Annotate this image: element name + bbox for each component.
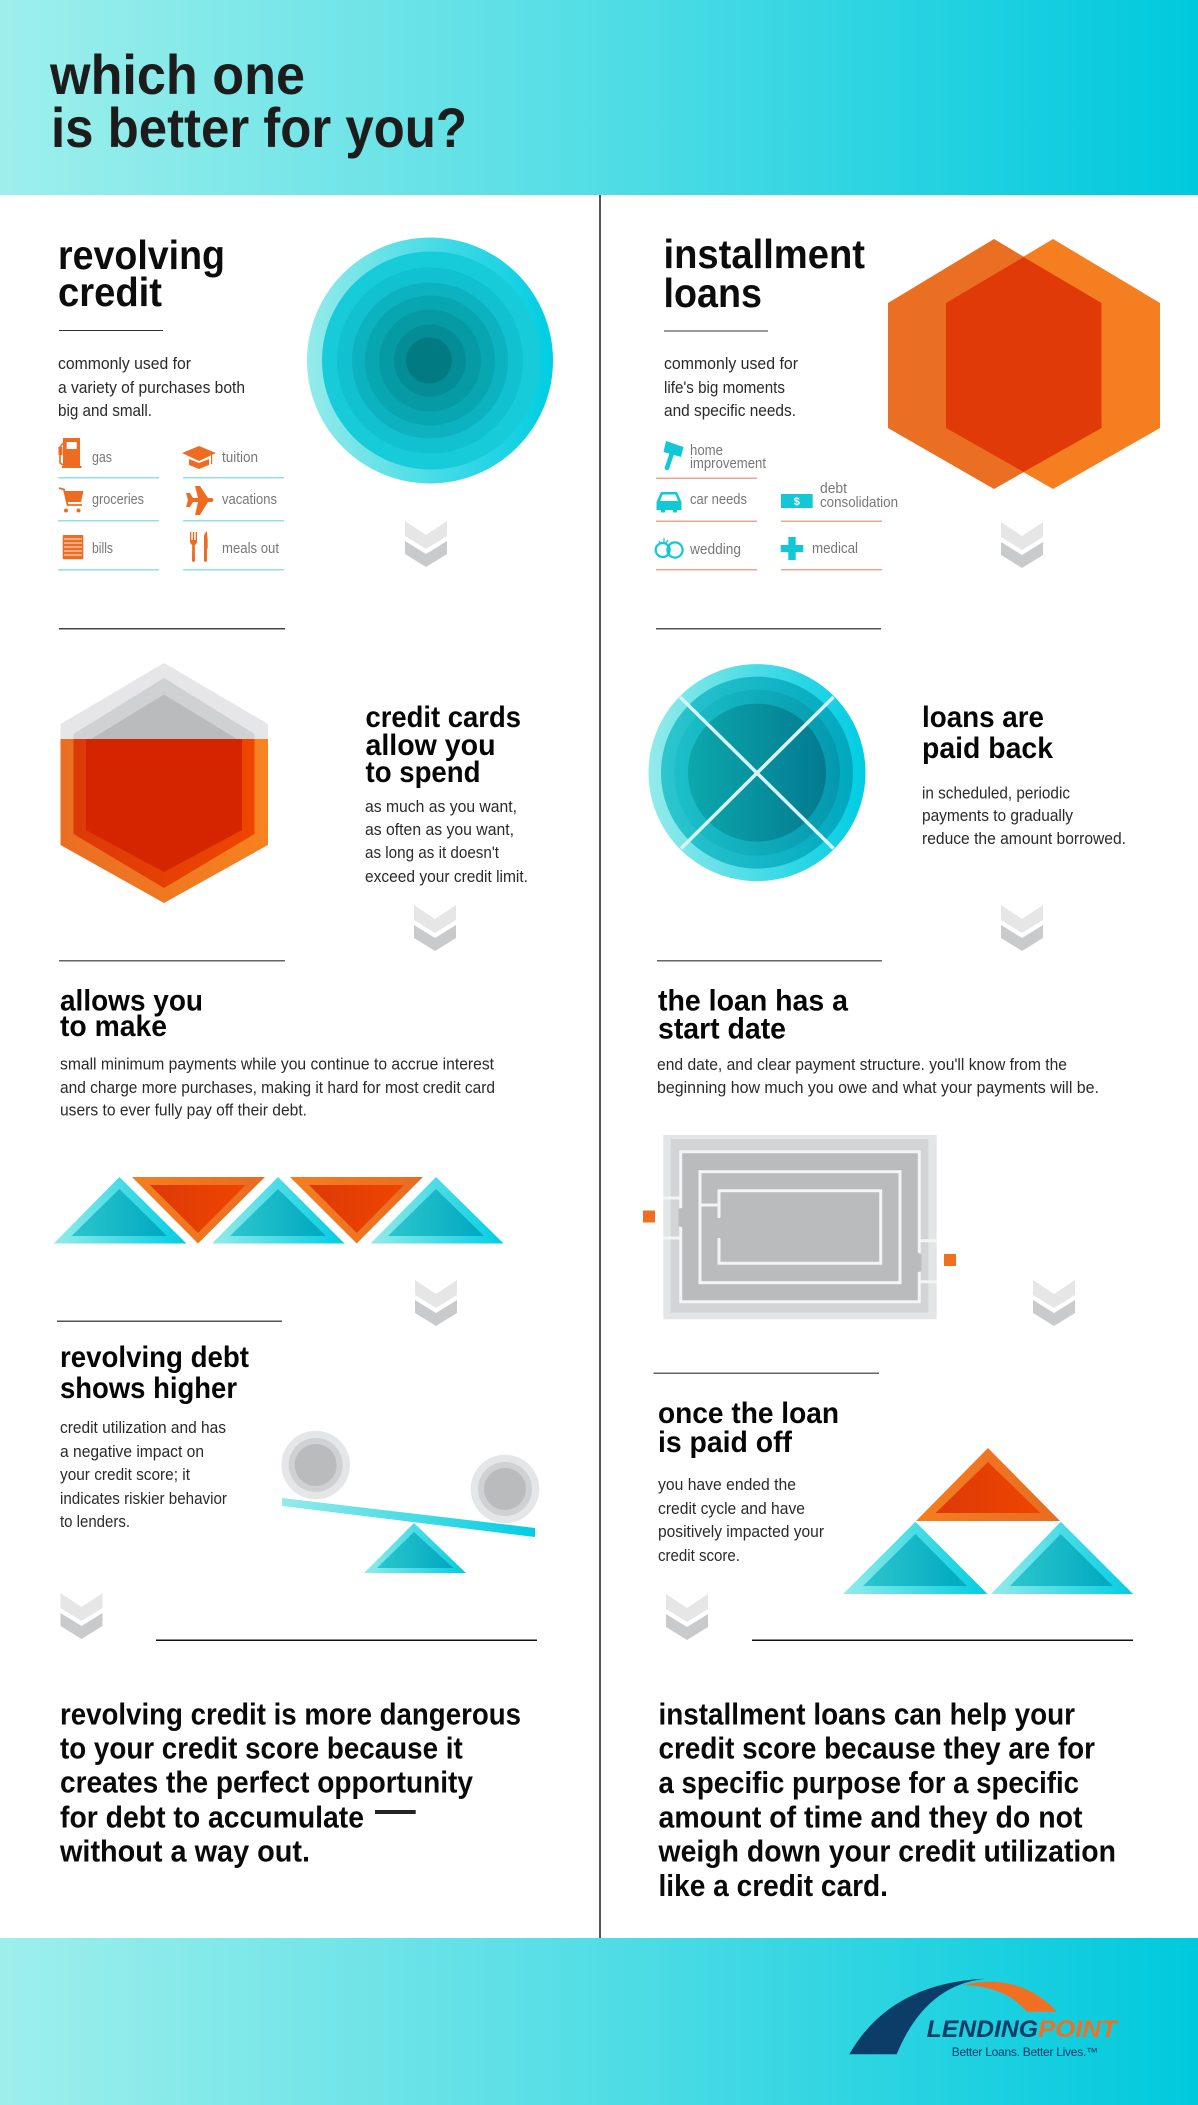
text: commonly used for [58,355,245,420]
text: once the loan is paid off: credit score. [658,1547,740,1565]
heading: revolving credit: credit [58,269,162,315]
text: credit cards allow you to spend: as long as it doesn't [365,844,499,862]
icon list: revolving purchases: tuition [222,449,258,466]
weight: right ball [471,1455,539,1523]
text: the loan has a start date: the loan has a [658,984,848,1018]
chart: overlapping hexagons [888,239,1160,489]
icon list: installment needs [656,441,898,570]
text: the loan has a start date: start date [658,1012,786,1046]
text: credit cards allow you to spend: to spend [366,756,480,789]
text: the loan has a start date: end date, and clear payment structure. you'll know from the [657,1056,1067,1074]
text: loans are paid back: loans are [922,701,1044,734]
text: loans are paid back: reduce the amount borrowed. [922,830,1126,848]
heading: revolving credit [58,232,225,315]
icon: dollar bill: $ [794,496,800,508]
icon list: installment needs: debt [820,480,848,497]
text: revolving debt shows higher: credit utilization and has [60,1419,226,1437]
icon: shopping cart [59,488,84,512]
icon: gas pump [58,438,82,468]
icon: wedding rings [656,538,683,558]
text: the loan has a start date [657,984,1099,1097]
title: is better for you? [51,96,467,159]
heading: installment loans: loans [664,270,762,316]
icon: graduation cap [182,446,216,469]
chart: triangle pyramid [843,1448,1133,1594]
chart: credit limit hexagon [60,663,268,903]
logo: LendingPoint: Better Loans. Better Lives.™ [952,2045,1098,2059]
heading: revolving credit: revolving [58,232,225,278]
panel: revolving credit intro [58,232,284,570]
text: once the loan is paid off: positively impacted your [658,1523,824,1541]
arrow: chevron [666,1594,708,1640]
text: commonly used for: and specific needs. [664,402,796,420]
text: revolving conclusion [59,1696,521,1868]
icon: paint brush [664,441,684,468]
marker: end [944,1254,956,1266]
text: allows you to make: to make [60,1010,167,1043]
icon list: installment needs: wedding [689,541,741,558]
icon list: installment needs: medical [812,540,858,557]
logo: LendingPoint: LENDING [927,2016,1038,2043]
text: credit cards allow you to spend [365,701,528,886]
text: the loan has a start date: beginning how much you owe and what your payments will be. [657,1079,1099,1097]
text: credit cards allow you to spend: allow you [366,729,496,762]
arrow: chevron [415,1280,457,1326]
icon: medical cross [781,537,803,560]
icon: dollar bill [781,494,813,508]
chart: quartered circle [648,664,866,881]
text: commonly used for: commonly used for [664,355,798,373]
text: once the loan is paid off: once the loan [658,1397,839,1430]
text: installment conclusion: weigh down your credit utilization [658,1834,1116,1868]
text: allows you to make: and charge more purchases, making it hard for most credit card [60,1079,495,1097]
text: credit cards allow you to spend: as much as you want, [365,798,517,816]
text: once the loan is paid off [658,1397,839,1565]
icon list: installment needs: consolidation [820,494,898,511]
text: allows you to make: allows you [60,984,203,1018]
heading: installment loans: installment [664,231,865,277]
icon: airplane [186,486,214,515]
icon: fork and knife [190,532,208,562]
arrow: chevron [405,521,447,567]
text: allows you to make: small minimum payments while you continue to accrue interest [60,1056,494,1074]
text: installment conclusion: credit score because they are for [658,1730,1095,1766]
text: once the loan is paid off: credit cycle and have [658,1500,805,1518]
text: loans are paid back: paid back [922,732,1053,765]
text: allows you to make: users to ever fully pay off their debt. [60,1102,307,1120]
icon list: installment needs: home [690,442,723,459]
icon: bill document [63,535,83,559]
text: revolving conclusion: without a way out. [59,1834,310,1868]
arrow: chevron [1033,1280,1075,1326]
title: which one [49,43,305,106]
fulcrum [364,1523,466,1573]
chart: seesaw [281,1431,539,1573]
text: revolving debt shows higher: your credit score; it [60,1466,190,1484]
arrow: chevron [1001,522,1043,568]
icon list: revolving purchases: meals out [222,540,280,557]
icon: car [656,492,682,512]
text: installment conclusion: a specific purpose for a specific [658,1765,1079,1800]
text: revolving debt shows higher: to lenders. [60,1513,130,1531]
text: revolving conclusion: creates the perfect opportunity [60,1765,474,1800]
text: once the loan is paid off: you have ended the [658,1476,796,1494]
text: loans are paid back: in scheduled, periodic [922,784,1070,802]
footer band [0,1938,1198,2105]
text: installment conclusion: amount of time and they do not [658,1800,1082,1834]
text: revolving debt shows higher: revolving debt [60,1341,249,1374]
chart: alternating triangles [54,1177,504,1244]
logo: LendingPoint: POINT [1038,2016,1119,2043]
beam [282,1498,535,1537]
arrow: chevron [60,1593,102,1639]
text: revolving debt shows higher: indicates riskier behavior [60,1490,227,1508]
icon list: revolving purchases: vacations [222,491,277,508]
text: revolving conclusion: to your credit score because it [60,1730,463,1766]
panel: installment loans intro [656,231,898,570]
text: credit cards allow you to spend: as often as you want, [365,821,514,839]
text: revolving conclusion: for debt to accumulate [60,1800,364,1834]
text: revolving debt shows higher: shows higher [60,1372,237,1405]
text: installment conclusion [658,1696,1116,1903]
text: commonly used for: life's big moments [664,379,785,397]
chart: maze [643,1135,956,1319]
text: commonly used for: commonly used for [58,355,191,373]
text: credit cards allow you to spend: exceed your credit limit. [365,868,528,886]
icon list: revolving purchases: bills [92,540,113,557]
icon list: installment needs: car needs [690,491,747,508]
icon list: installment needs: improvement [690,455,767,472]
column divider [599,195,601,1938]
text: credit cards allow you to spend: credit cards [366,701,521,734]
logo: LendingPoint [849,1979,1119,2059]
icon list: revolving purchases: groceries [92,491,144,508]
title [49,43,467,159]
text: once the loan is paid off: is paid off [658,1426,793,1459]
text: commonly used for: big and small. [58,402,152,420]
arrow: chevron [414,905,456,951]
text: installment conclusion: like a credit card. [658,1868,888,1903]
icon list: revolving purchases [58,438,284,570]
header band [0,0,1198,195]
weight: left ball [281,1431,350,1499]
heading: installment loans [664,231,865,316]
chart: concentric circle [307,238,553,484]
text: loans are paid back: payments to gradually [922,807,1074,825]
arrow: chevron [1001,905,1043,951]
text: revolving debt shows higher [60,1341,249,1531]
text: installment conclusion: installment loans can help your [658,1696,1075,1732]
icon list: revolving purchases: gas [92,449,112,466]
text: commonly used for [664,355,798,420]
text: loans are paid back [922,701,1126,848]
text: allows you to make [60,984,495,1120]
text: commonly used for: a variety of purchases both [58,379,245,397]
marker: start [643,1210,655,1222]
text: revolving conclusion: revolving credit is more dangerous [60,1696,521,1732]
text: revolving debt shows higher: a negative impact on [60,1443,204,1461]
